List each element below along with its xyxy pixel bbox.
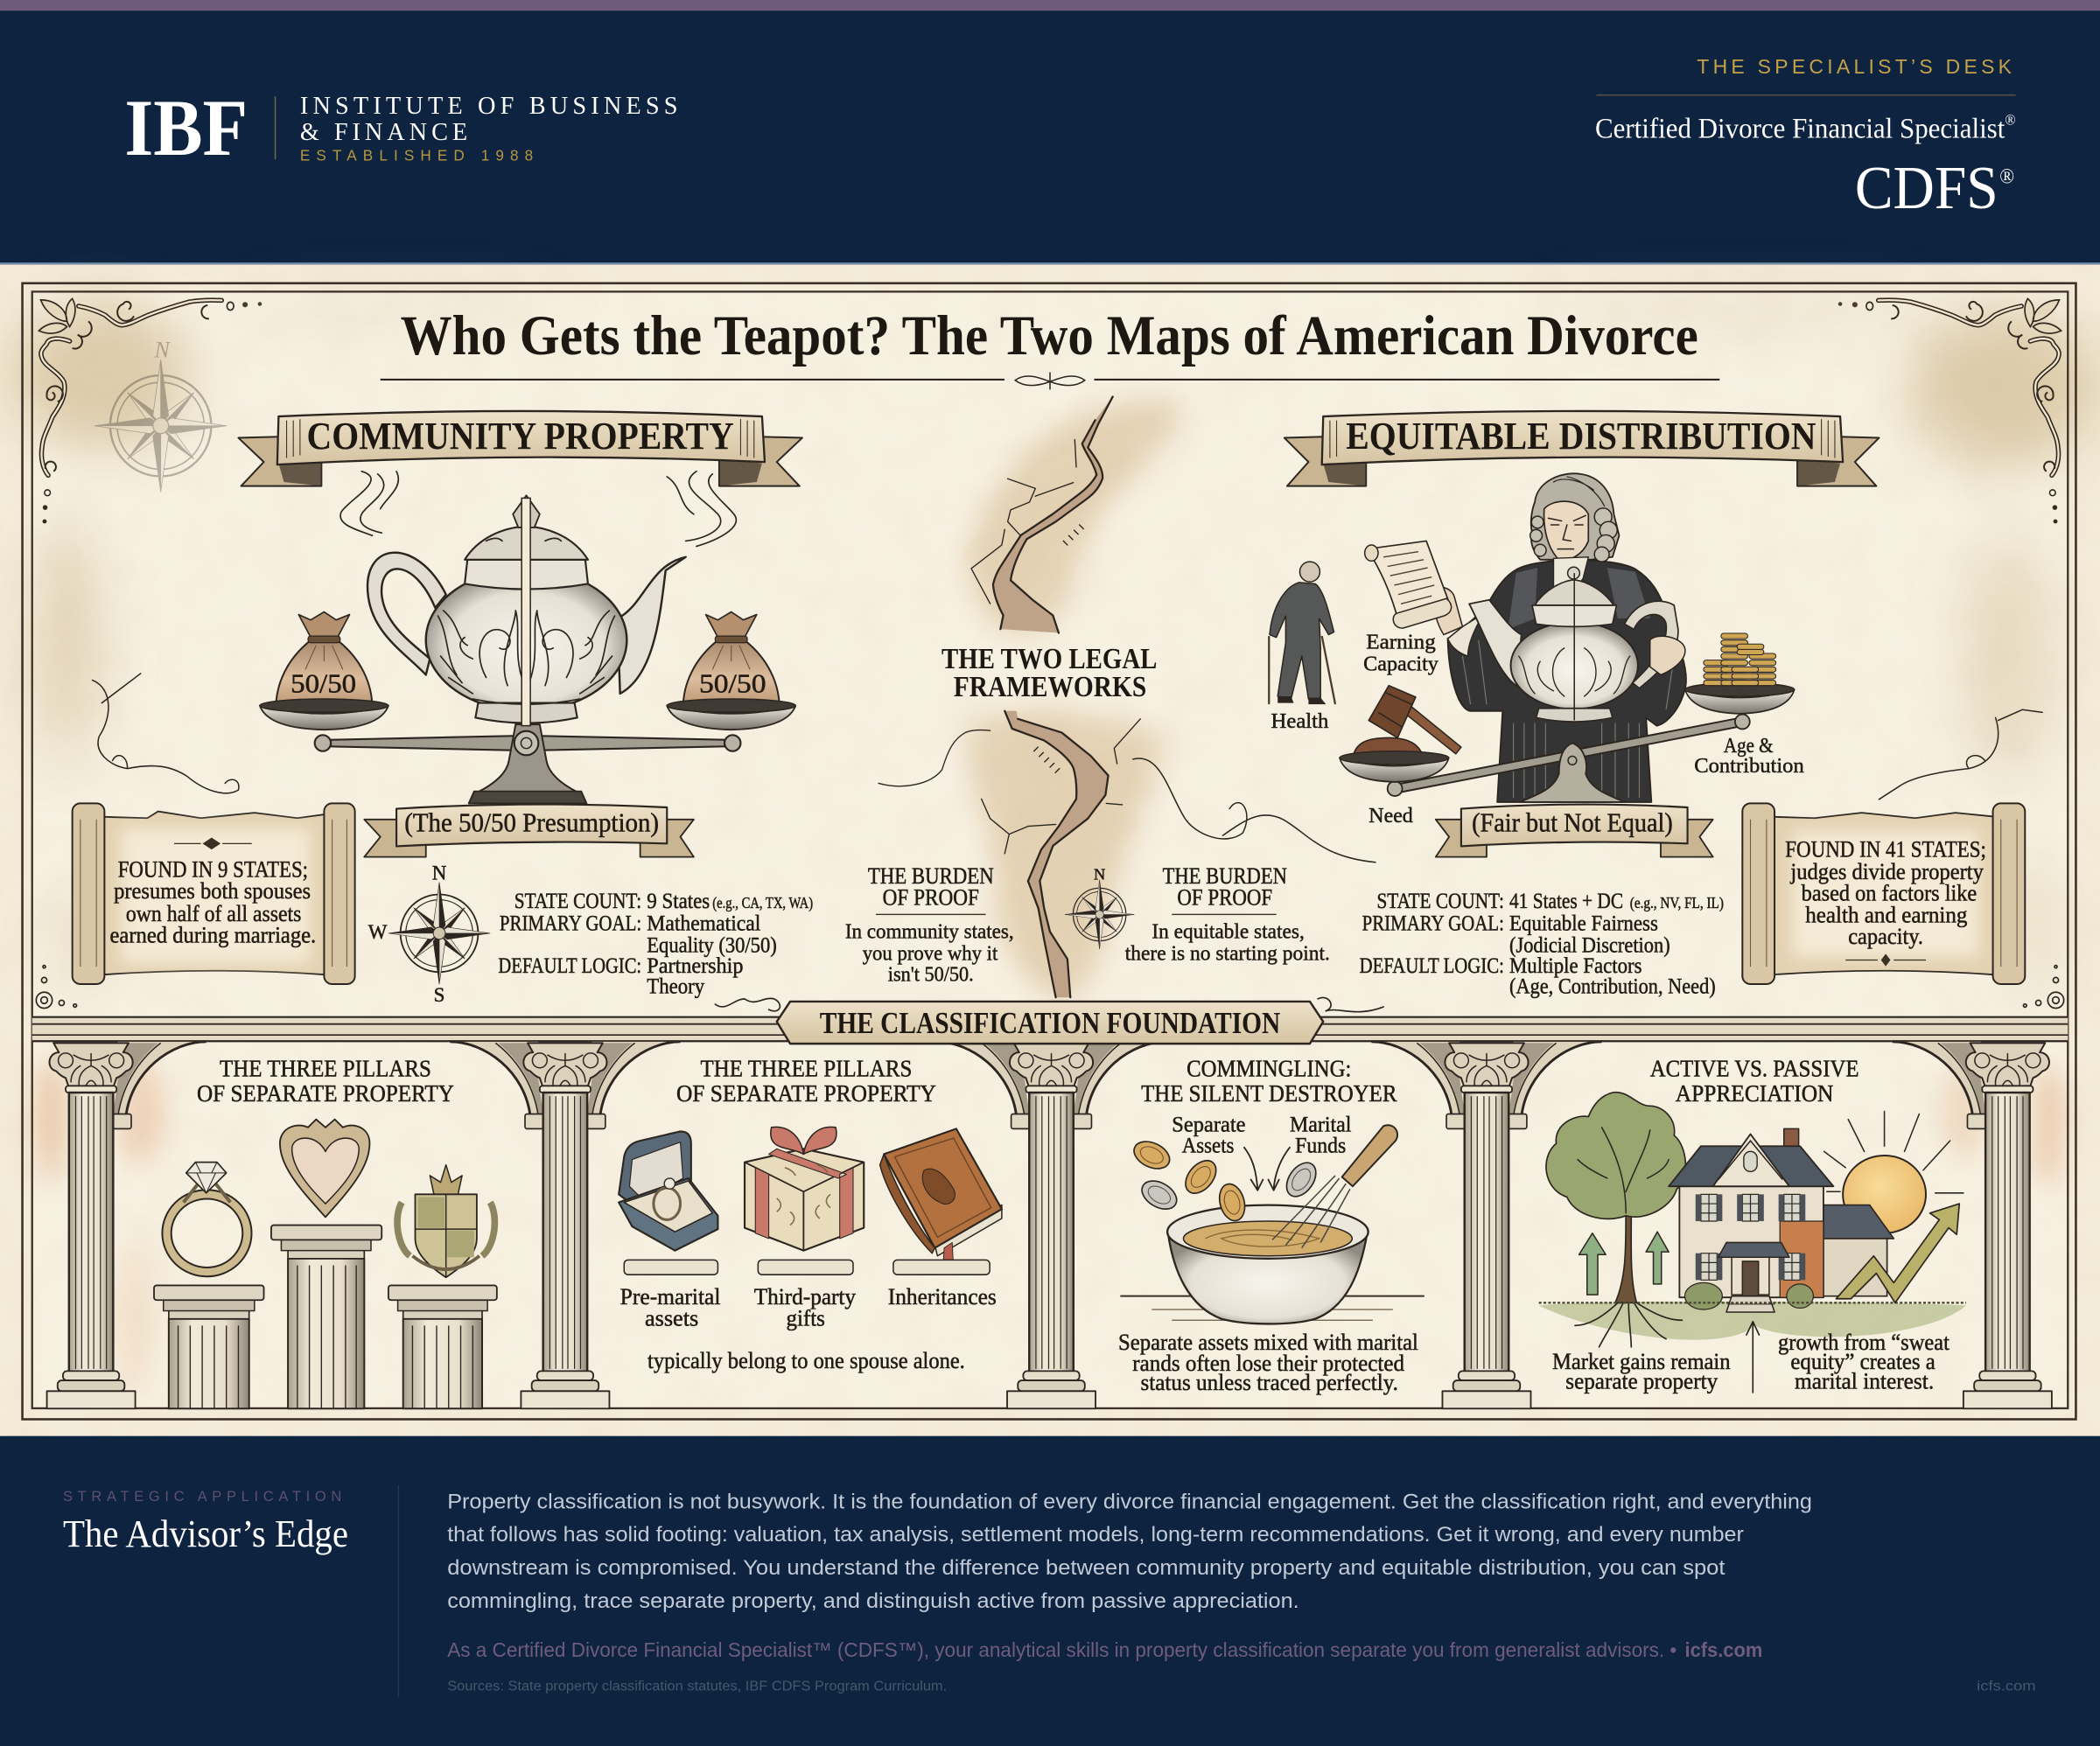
money bag right: 50/50 [699,668,766,698]
icon: sun [1824,1111,1964,1233]
earning capacity label [1363,631,1439,675]
burden of proof left [845,863,1014,986]
caption: active: growth from “sweat [1778,1330,1950,1355]
scroll: found in 9 states: presumes both spouses [114,878,311,904]
money bag left [260,612,388,730]
label: third-party gifts [754,1284,856,1330]
compass: N [432,863,447,884]
CDFS registered mark: ® [1999,165,2014,189]
panel: active vs passive [1539,1055,1966,1393]
judge [1365,473,1686,802]
river lower [982,711,1140,997]
earning capacity label: Capacity [1363,652,1439,675]
teapot divided in half [368,495,686,726]
body paragraph: Property classification is not busywork. It is the foundation of every divorce financial engagement. Get the classification right, and everything [447,1490,1812,1513]
compass: W [368,921,388,943]
icon: inheritance book [880,1128,1002,1269]
money bag right [667,612,795,730]
caption: rands often lose their protected [1132,1351,1404,1376]
body paragraph: commingling, trace separate property, and distinguish active from passive appreciation. [447,1589,1299,1613]
burden of proof left: isn't 50/50. [888,962,974,986]
equitable distribution facts: DEFAULT LOGIC: [1360,953,1504,978]
community property facts: DEFAULT LOGIC: [498,953,641,978]
logo mark: IBF [124,83,248,172]
burden of proof right [1125,863,1330,965]
title text: Who Gets the Teapot? The Two Maps of American Divorce [401,304,1698,367]
label: third-party gifts: gifts [786,1305,825,1330]
burden compass: N [1094,866,1105,883]
equitable distribution facts: STATE COUNT: [1376,889,1504,913]
flourish to the right [1133,758,1376,863]
panel: commingling [1118,1055,1424,1395]
label: marital funds [1290,1112,1351,1157]
judge robe [1448,560,1686,802]
label: marital funds: Marital [1290,1112,1351,1136]
burden of proof left: THE BURDEN [868,863,994,889]
age and contribution label: Contribution [1694,754,1804,778]
icon: heart locket [280,1120,369,1217]
caption: passive [1552,1349,1731,1393]
ribbon: fair but not equal: (Fair but Not Equal) [1472,808,1673,838]
label: pre-marital assets: Pre-marital [620,1284,720,1310]
scroll: found in 9 states: FOUND IN 9 STATES; [118,857,308,883]
credential name: Certified Divorce Financial Specialist [1595,114,2005,145]
judge face [1544,501,1588,560]
icon: gift box [745,1127,864,1251]
community property facts: STATE COUNT: [514,889,641,913]
scroll: found in 9 states: own half of all assets [126,901,301,926]
institute name: INSTITUTE OF BUSINESS [300,93,677,120]
sources: Sources: State property classification statutes, IBF CDFS Program Curriculum. [447,1679,947,1694]
title [381,304,1719,389]
equitable distribution facts: (e.g., NV, FL, IL) [1630,894,1724,911]
institute name second line: & FINANCE [300,119,467,146]
pedestal right [388,1285,497,1408]
equitable distribution facts: (Jodicial Discretion) [1509,932,1670,957]
label: pre-marital assets [620,1284,720,1330]
registered mark: ® [2005,111,2016,128]
scroll: found in 41 states: judges divide property [1789,859,1984,884]
frieze [32,1016,2068,1042]
burden of proof right: THE BURDEN [1163,863,1287,889]
label: separate assets: Assets [1182,1133,1234,1157]
panel: three pillars illustration [154,1055,497,1408]
ribbon: fair but not equal [1436,805,1713,857]
scroll: found in 41 states [1742,803,2025,984]
community property facts: Partnership [647,953,743,978]
body paragraph [447,1490,1812,1613]
panel heading: COMMINGLING: [1186,1055,1351,1082]
caption: Separate assets mixed with marital [1118,1330,1418,1355]
flourish to the left [878,730,990,786]
caption: passive: separate property [1565,1368,1718,1393]
equitable distribution facts: PRIMARY GOAL: [1362,911,1504,935]
community property section [73,411,813,1006]
judge teapot [1469,567,1678,722]
classification foundation banner [715,997,1383,1044]
panel: separate property examples [619,1055,1002,1373]
column 1 [47,1043,136,1408]
panel heading: OF SEPARATE PROPERTY [676,1079,936,1107]
judge wig [1531,473,1620,560]
banner: community property [238,411,802,486]
burden of proof right: OF PROOF [1177,884,1272,911]
column 5 [1964,1043,2052,1408]
pedestal middle [271,1226,382,1408]
scroll: found in 41 states: health and earning [1805,903,1967,928]
panel heading: THE SILENT DESTROYER [1141,1079,1397,1107]
footer heading: The Advisor’s Edge [63,1512,348,1555]
label: pre-marital assets: assets [645,1305,698,1330]
judge cuff [1448,613,1484,656]
panel heading: OF SEPARATE PROPERTY [197,1079,454,1107]
equitable distribution facts: 41 States + DC [1509,889,1623,913]
frame [23,283,2076,1419]
burden of proof left: OF PROOF [883,884,979,911]
icon: house [1669,1128,1894,1312]
header rule [0,262,2100,264]
gavel on pan [1340,686,1461,782]
panel heading [197,1055,454,1107]
old man figure [1269,562,1335,704]
caption: active: marital interest. [1795,1368,1934,1393]
grass line [1539,1302,1966,1303]
IBF logo [124,83,677,172]
title divider with flourish [381,373,1719,389]
label: marital funds: Funds [1295,1133,1346,1157]
footer band [0,1436,2100,1746]
pedestal left [154,1285,264,1408]
judge scroll [1368,541,1449,625]
equitable distribution section [1269,411,2025,999]
corner ornament top right [1838,298,2062,524]
icon: family crest [397,1165,494,1277]
equitable distribution facts: Equitable Fairness [1509,911,1658,935]
caption: status unless traced perfectly. [1140,1370,1398,1395]
burden of proof right: there is no starting point. [1125,941,1330,965]
scroll: found in 9 states: earned during marriage. [110,923,316,948]
judge left hand [1431,587,1462,635]
age and contribution label: Age & [1724,734,1774,758]
parchment ground [0,264,2100,1436]
community property facts: PRIMARY GOAL: [500,911,641,935]
divider arrow [1746,1322,1759,1393]
footer divider [398,1484,399,1696]
ribbon: presumption [364,805,694,857]
call to action: As a Certified Divorce Financial Specialist™ (CDFS™), your analytical skills in property classification separate you from generalist advisors. • [447,1638,1676,1661]
site link: icfs.com [1977,1678,2036,1694]
header band [0,0,2100,264]
banner: equitable distribution: EQUITABLE DISTRIBUTION [1346,414,1816,457]
coins on pan [1685,633,1795,714]
eyebrow: THE SPECIALIST’S DESK [1697,55,2012,78]
judge right hand [1650,636,1685,674]
tilted scale [1388,715,1750,802]
central legal frameworks [878,397,1376,997]
top accent bar [0,0,2100,10]
classical arcade [32,1016,2068,1408]
frameworks heading second line: FRAMEWORKS [954,671,1146,703]
label: separate assets: Separate [1172,1112,1245,1136]
compass: S [434,984,444,1006]
community property facts: Equality (30/50) [647,932,777,957]
established: ESTABLISHED 1988 [300,147,533,164]
parchment illustration [0,264,2100,1436]
community property facts: Mathematical [647,911,760,935]
credential block [1595,55,2016,222]
caption [1118,1330,1418,1395]
panel heading: ACTIVE VS. PASSIVE [1650,1055,1858,1082]
call to action: icfs.com [1685,1638,1762,1661]
steam left [340,471,398,535]
left flourish [93,674,239,793]
central map stain [967,401,1186,997]
faint compass rose [94,338,227,492]
burden of proof left: In community states, [845,919,1014,943]
body paragraph: downstream is compromised. You understand the difference between community property and equitable distribution, you can spot [447,1556,1726,1580]
caption: typically belong to one spouse alone. [648,1348,965,1373]
community property facts: Theory [647,974,704,999]
corner ornament bottom left [36,966,77,1009]
credential rule [1596,94,2016,95]
community property facts: (e.g., CA, TX, WA) [712,894,813,911]
scroll: found in 41 states: capacity. [1848,924,1923,949]
burden of proof right: In equitable states, [1152,919,1305,943]
need label: Need [1368,804,1413,828]
ground [1539,1302,1966,1340]
icon: ring box [619,1131,718,1251]
icon: diamond ring [167,1163,247,1272]
label: separate assets [1172,1112,1245,1157]
green arrows [1579,1232,1669,1295]
panel heading [1141,1055,1397,1107]
label: inheritances: Inheritances [888,1284,997,1310]
scale [315,724,740,803]
banner: equitable distribution [1284,411,1879,486]
caption: passive: Market gains remain [1552,1349,1731,1374]
community property facts [498,889,813,999]
arrows into bowl [1244,1148,1290,1191]
corner ornament bottom right [2023,966,2064,1009]
judge cravat [1554,557,1588,603]
scroll: found in 9 states [73,803,355,984]
age and contribution label [1694,734,1804,778]
icon: coins [1130,1136,1322,1224]
zigzag growth arrow [1836,1204,1959,1303]
panel heading: THE THREE PILLARS [220,1055,431,1082]
corner ornament top left [38,298,262,524]
body paragraph: that follows has solid footing: valuation, tax analysis, settlement models, long-term recommendations. Get it wrong, and every number [447,1523,1744,1547]
community property facts: 9 States [647,889,710,913]
column 3 [1007,1043,1096,1408]
panel heading [1650,1055,1858,1107]
equitable distribution facts [1360,889,1724,999]
steam right [667,471,736,547]
health label: Health [1271,709,1328,733]
earning capacity label: Earning [1366,631,1436,654]
column 2 [521,1043,609,1408]
CDFS: CDFS [1855,154,1998,222]
scroll: found in 41 states: based on factors like [1802,881,1977,906]
caption: active [1778,1330,1950,1393]
burden compass [1065,866,1134,949]
equitable distribution facts: Multiple Factors [1509,953,1642,978]
icon: tree [1546,1093,1685,1347]
column 4 [1442,1043,1530,1408]
panel heading: THE THREE PILLARS [701,1055,912,1082]
label: third-party gifts: Third-party [754,1284,856,1310]
banner: community property: COMMUNITY PROPERTY [307,414,734,457]
caption: active: equity” creates a [1790,1349,1936,1374]
right flourish [1879,709,2042,800]
eyebrow: STRATEGIC APPLICATION [63,1488,341,1505]
money bag left: 50/50 [290,668,356,698]
icon: mixing bowl with whisk [1120,1125,1424,1323]
river upper [971,397,1113,633]
classification foundation banner: THE CLASSIFICATION FOUNDATION [820,1007,1280,1040]
small plinths [624,1260,990,1275]
logo divider [275,96,276,159]
burden of proof left: you prove why it [863,941,998,965]
scroll: found in 41 states: FOUND IN 41 STATES; [1785,837,1986,863]
compass [368,863,490,1006]
ribbon: presumption: (The 50/50 Presumption) [404,808,659,838]
arch spandrels [113,1042,1986,1128]
frameworks heading: THE TWO LEGAL [942,643,1157,675]
compass N: N [154,338,172,363]
panel heading: APPRECIATION [1676,1079,1833,1107]
panel heading [676,1055,936,1107]
equitable distribution facts: (Age, Contribution, Need) [1509,974,1716,999]
